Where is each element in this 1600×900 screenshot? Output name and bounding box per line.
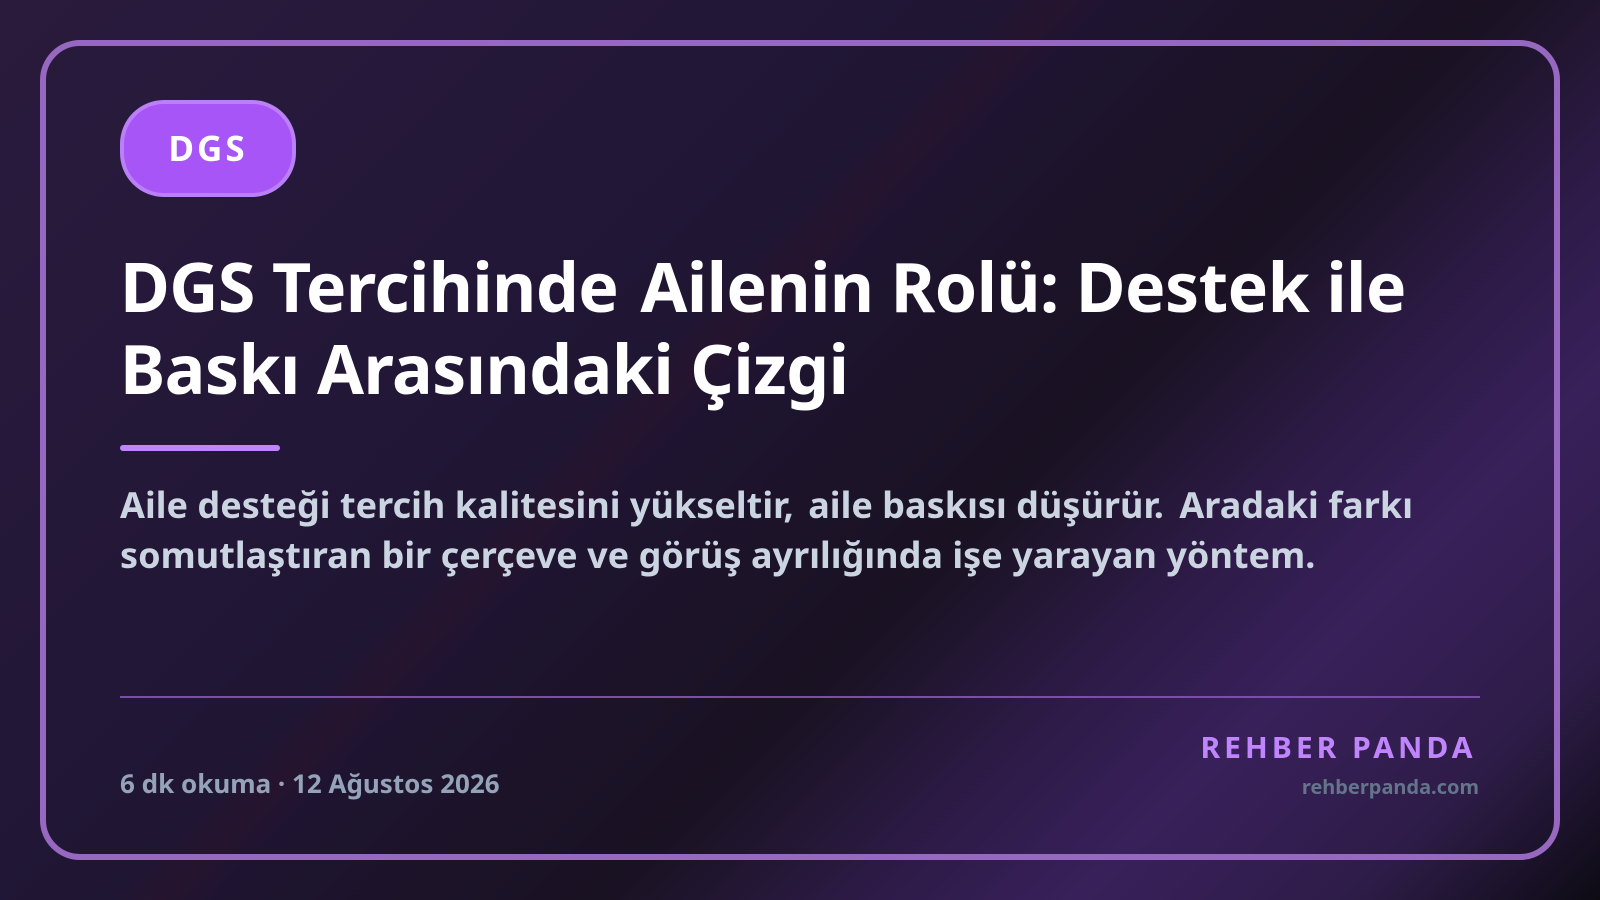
brand name: REHBER PANDA	[1200, 726, 1476, 767]
website: rehberpanda.com	[1302, 773, 1479, 800]
category badge: DGS	[168, 125, 248, 172]
accent rule	[120, 445, 280, 451]
brand block	[1200, 726, 1479, 800]
title: Baskı Arasındaki Çizgi	[120, 321, 848, 414]
footer divider	[120, 696, 1480, 698]
title	[120, 239, 1406, 414]
subtitle: Aile desteği tercih kalitesini yükseltir, aile baskısı düşürür. Aradaki farkı	[120, 480, 1413, 529]
subtitle	[120, 480, 1413, 579]
category badge	[120, 100, 296, 197]
title: DGS Tercihinde Ailenin Rolü: Destek ile	[120, 239, 1406, 332]
subtitle: somutlaştıran bir çerçeve ve görüş ayrılığında işe yarayan yöntem.	[120, 530, 1315, 579]
reading time and date: 6 dk okuma · 12 Ağustos 2026	[120, 765, 500, 801]
